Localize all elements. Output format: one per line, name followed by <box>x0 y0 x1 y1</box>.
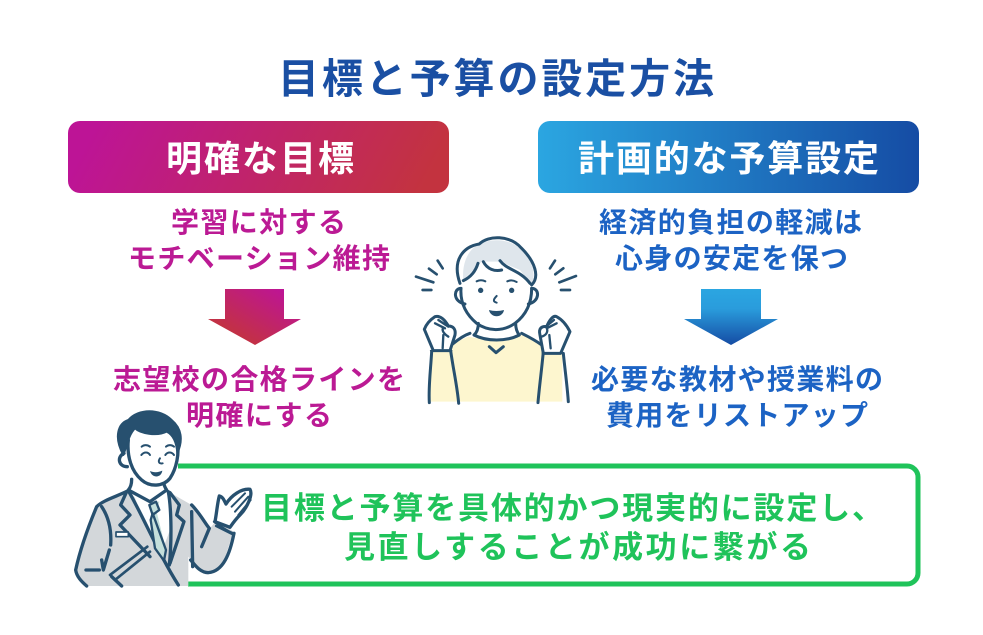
callout: summary <box>178 466 918 584</box>
text: passing line: 明確にする <box>186 400 332 431</box>
text: list up costs: 費用をリストアップ <box>606 400 868 431</box>
callout: summary: 目標と予算を具体的かつ現実的に設定し、 <box>261 491 883 526</box>
icon: presenter in suit <box>76 411 251 586</box>
text: financial burden: 経済的負担の軽減は <box>599 207 862 238</box>
arrow: clear goals <box>208 289 301 345</box>
panel: clear goals <box>68 121 449 431</box>
text: list up costs: 必要な教材や授業料の <box>591 364 883 395</box>
arrow: budget planning <box>684 289 778 345</box>
panel: budget planning <box>538 121 919 431</box>
text: passing line: 志望校の合格ラインを <box>113 364 405 395</box>
text: financial burden <box>599 207 862 274</box>
title: 目標と予算の設定方法 <box>278 56 714 102</box>
text: motivation: モチベーション維持 <box>128 243 390 274</box>
icon: cheering student <box>416 238 576 403</box>
text: list up costs <box>591 364 883 431</box>
header: clear goals: 明確な目標 <box>166 138 354 179</box>
header: budget planning: 計画的な予算設定 <box>578 138 879 179</box>
text: motivation: 学習に対する <box>171 207 346 238</box>
header: clear goals <box>68 121 449 193</box>
callout: summary: 見直しすることが成功に繋がる <box>344 530 811 565</box>
text: passing line <box>113 364 405 431</box>
header: budget planning <box>538 121 919 193</box>
text: financial burden: 心身の安定を保つ <box>615 243 848 274</box>
text: motivation <box>128 207 390 274</box>
